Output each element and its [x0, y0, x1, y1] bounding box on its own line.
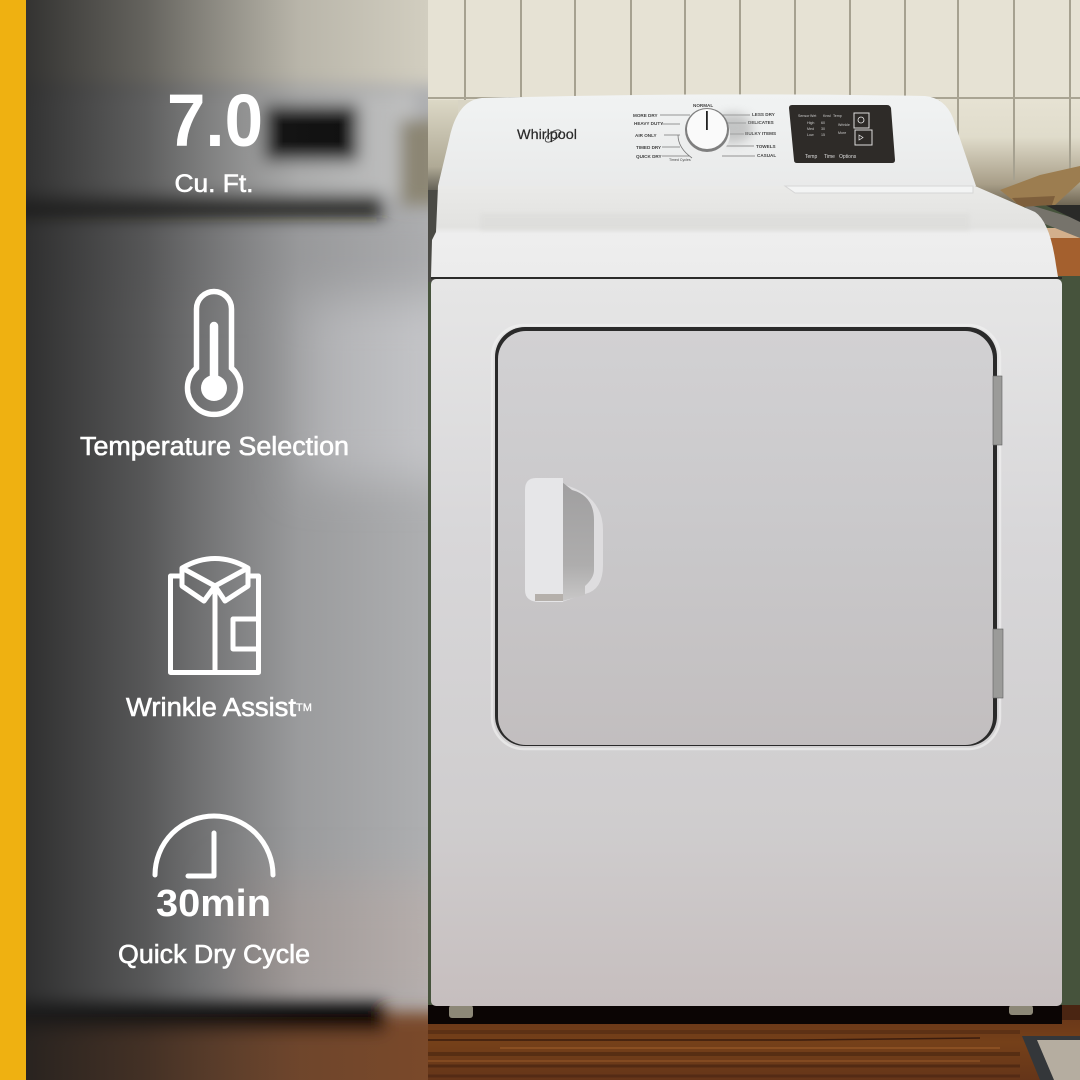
cycle labels: BULKY ITEMS — [745, 131, 776, 136]
blurred feature panel — [26, 0, 428, 1080]
dryer lid — [431, 186, 1058, 277]
cycle labels — [633, 103, 776, 162]
dial — [684, 108, 753, 157]
control display panel: Temp — [805, 154, 817, 160]
icon: clock — [155, 816, 273, 876]
control display panel: More — [838, 131, 846, 135]
control console — [438, 94, 976, 186]
control display panel: 60 — [821, 121, 825, 125]
control display panel: Temp — [833, 114, 842, 118]
dryer feet — [449, 1005, 1033, 1018]
dryer — [431, 94, 1062, 1006]
yellow side bar — [0, 0, 26, 1080]
feature: wrinkle assist: TM — [296, 702, 312, 714]
icon: shirt — [170, 558, 258, 672]
dryer cabinet body — [431, 279, 1062, 1006]
feature: quick dry cycle — [118, 816, 310, 969]
control display panel: Wrinkle — [838, 123, 850, 127]
control display panel: Low — [807, 133, 814, 137]
cycle labels: TIMED DRY — [636, 145, 661, 150]
Whirlpool logo: Whirlpool — [517, 127, 577, 142]
feature: capacity — [167, 79, 263, 198]
hinges — [993, 376, 1003, 698]
cycle labels: MORE DRY — [633, 113, 658, 118]
cycle labels: DELICATES — [748, 120, 774, 125]
feature: wrinkle assist — [126, 558, 312, 722]
door recess — [492, 325, 1000, 749]
control display panel — [789, 105, 895, 163]
icon: thermometer — [188, 292, 240, 414]
door — [498, 331, 993, 745]
cycle labels: HEAVY DUTY — [634, 121, 663, 126]
control display panel: Wet — [810, 114, 816, 118]
control display panel: Med — [807, 127, 814, 131]
cycle labels: CASUAL — [757, 153, 776, 158]
rug — [1022, 1036, 1080, 1080]
feature: capacity: 7.0 — [167, 79, 263, 162]
feature: temperature selection: Temperature Selection — [80, 433, 349, 461]
dispenser tab — [785, 186, 973, 193]
feature: quick dry cycle: Quick Dry Cycle — [118, 941, 310, 969]
feature: temperature selection — [80, 292, 349, 461]
control display panel: Options — [839, 154, 857, 160]
control display panel: 30 — [821, 127, 825, 131]
cycle labels: Timed Cycles — [669, 158, 691, 162]
feature: wrinkle assist: Wrinkle Assist — [126, 694, 296, 722]
cycle labels: NORMAL — [693, 103, 713, 108]
panel dark overlay gradient — [26, 0, 388, 1080]
control display panel: Time — [824, 154, 835, 160]
control display panel: Sensor — [798, 114, 810, 118]
background: kitchen tile wall — [428, 0, 1080, 1080]
floor — [428, 1005, 1080, 1080]
cycle labels: AIR ONLY — [635, 133, 657, 138]
feature: capacity: Cu. Ft. — [174, 170, 254, 198]
control display panel: Knwl — [823, 114, 831, 118]
control display panel: High — [807, 121, 814, 125]
control display panel: 15 — [821, 133, 825, 137]
cycle labels: TOWELS — [756, 144, 776, 149]
feature: quick dry cycle: 30min — [156, 883, 271, 925]
door handle — [525, 478, 603, 602]
sponge and counter — [1000, 166, 1080, 276]
cycle labels: LESS DRY — [752, 112, 775, 117]
cycle labels: QUICK DRY — [636, 154, 662, 159]
